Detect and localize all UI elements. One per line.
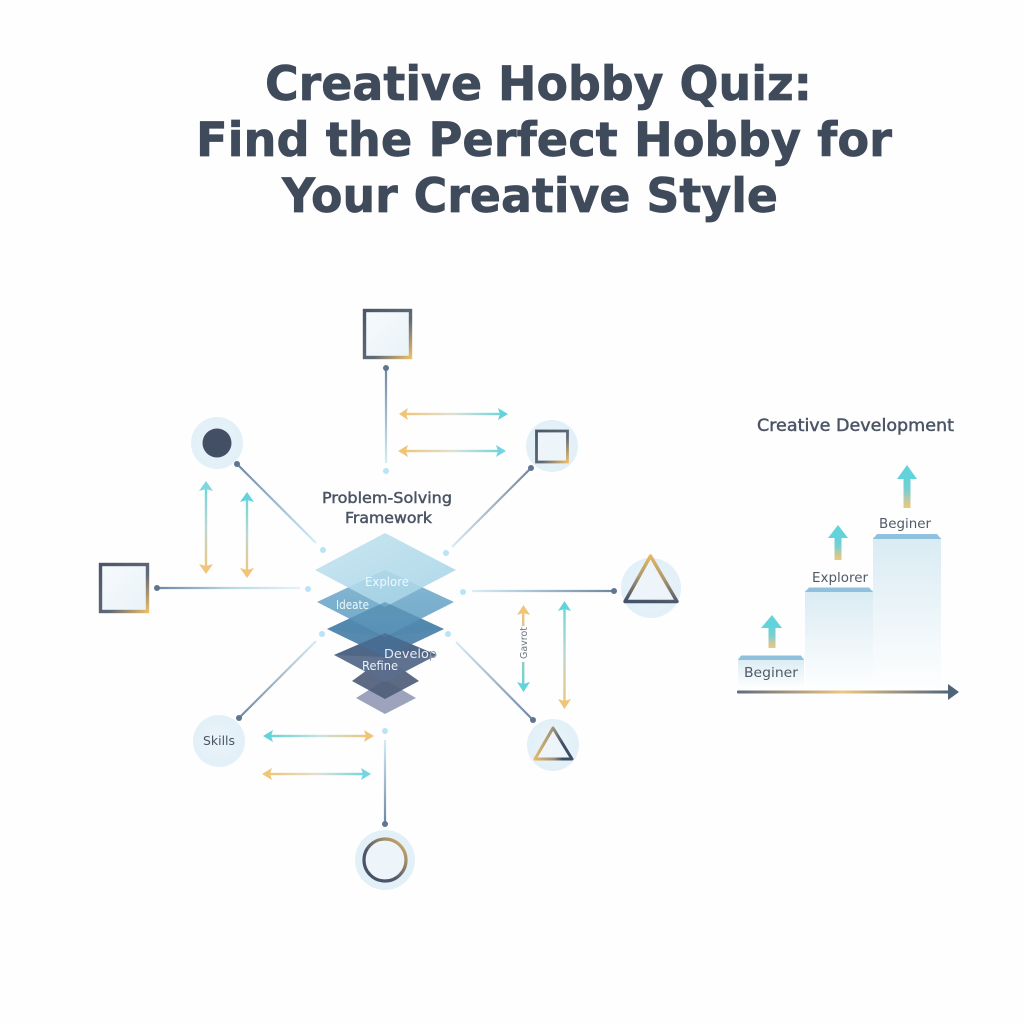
layer label: Develop: Develop: [384, 646, 437, 661]
spoke: top square node: [364, 310, 410, 474]
framework heading: Problem-Solving: [322, 489, 452, 507]
spoke: skills node: [193, 631, 325, 767]
growth arrow: step 2: [828, 525, 848, 560]
arrow: right vertical 2: [558, 601, 571, 709]
framework heading: Framework: [345, 509, 432, 527]
spoke: skills node: Skills: [203, 733, 235, 748]
spoke: upper right square node: [443, 420, 578, 556]
arrow: top horizontal 1: [399, 408, 508, 420]
bar: step 2: [805, 570, 873, 688]
spoke: left square node: [100, 564, 311, 612]
arrow: left vertical 1: [199, 481, 213, 574]
bar: step 3: Beginer: [879, 516, 931, 532]
spoke: bottom circle node: [355, 728, 415, 890]
arrow: bottom horizontal 2: [262, 768, 371, 780]
creative development heading: Creative Development: [757, 416, 955, 435]
title: Your Creative Style: [281, 169, 778, 224]
spoke: upper left dark circle node: [191, 417, 326, 553]
spoke: lower right triangle node: [445, 631, 579, 771]
title: [196, 57, 893, 224]
arrow: bottom horizontal 1: [263, 730, 374, 742]
horizontal axis arrow: [737, 684, 959, 700]
arrow: left vertical 2: [240, 492, 254, 578]
staircase bar chart: [738, 516, 941, 688]
arrow: right vertical with label: Gavrot: [519, 627, 530, 659]
spoke: right triangle node: [460, 556, 681, 618]
bar: step 1: [738, 656, 804, 688]
title: Creative Hobby Quiz:: [265, 57, 812, 112]
growth arrow: step 1: [761, 615, 782, 648]
framework heading: [322, 489, 452, 527]
bar: step 3: [873, 516, 941, 688]
bar: step 1: Beginer: [744, 665, 798, 681]
title: Find the Perfect Hobby for: [196, 113, 893, 168]
layer label: Ideate: Ideate: [336, 598, 369, 612]
arrow: right vertical with label: [517, 605, 530, 692]
growth arrow: step 3: [897, 465, 917, 508]
layer label: Explore: Explore: [365, 575, 409, 589]
layer label: Refine: Refine: [362, 658, 398, 673]
bar: step 2: Explorer: [812, 570, 868, 586]
arrow: top horizontal 2: [398, 445, 506, 457]
layered diamond stack: [315, 533, 456, 714]
